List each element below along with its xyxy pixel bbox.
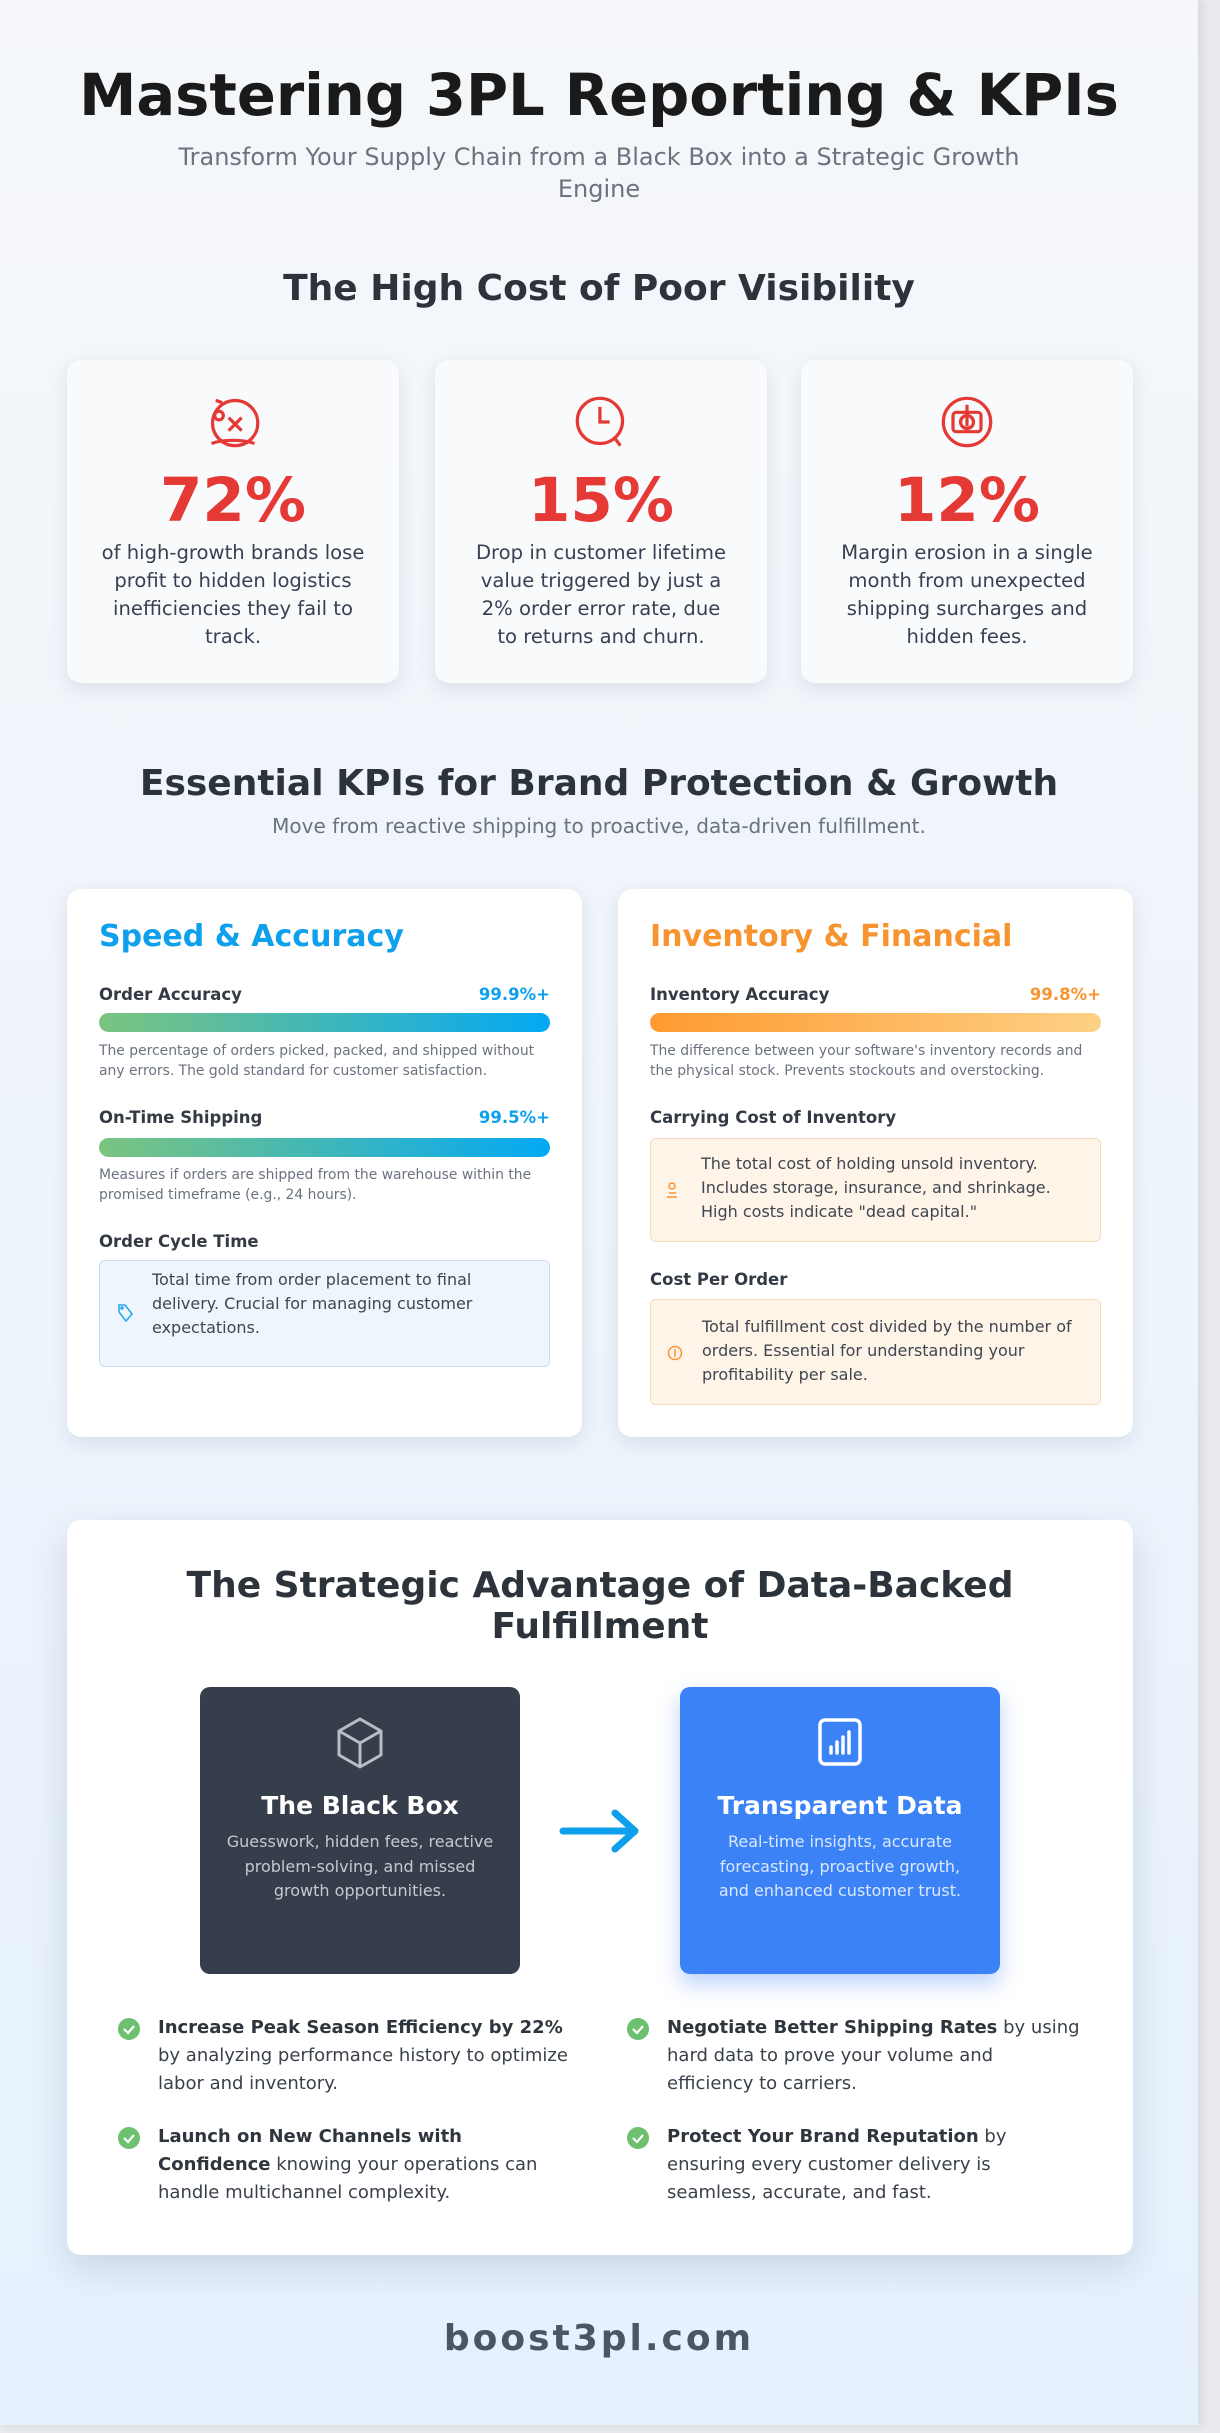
panel: strategic advantage — [67, 1520, 1133, 2255]
box text: Real-time insights, accurate forecasting, proactive growth, and enhanced customer trust. — [719, 1832, 961, 1900]
icon: broken piggy — [210, 398, 260, 448]
heading: essential KPIs: Essential KPIs for Brand Protection & Growth — [140, 763, 1058, 804]
icon: cube — [338, 1718, 382, 1768]
kpi: on-time shipping — [99, 1108, 550, 1127]
kpi: inventory accuracy — [650, 985, 1101, 1004]
box: black box — [200, 1687, 520, 1974]
kpi: on-time shipping: On-Time Shipping — [99, 1108, 262, 1127]
stat card 2 — [435, 360, 767, 683]
kpi: carrying cost: Carrying Cost of Inventory — [650, 1108, 896, 1127]
stat card 3 — [801, 360, 1133, 683]
subtitle: Transform Your Supply Chain from a Black Box into a Strategic Growth Engine — [178, 143, 1020, 203]
panel: inventory & financial: Total fulfillment cost divided by the number of orders. Essential for understanding your profitability per sale. — [702, 1317, 1072, 1384]
number: 15% — [528, 465, 674, 536]
footer: boost3pl.com — [444, 2318, 754, 2359]
stat card 1 — [67, 360, 399, 683]
kpi: cost per order: Cost Per Order — [650, 1270, 787, 1289]
heading: high cost: The High Cost of Poor Visibility — [283, 268, 915, 309]
panel: speed & accuracy — [67, 889, 582, 1437]
benefit 1: Increase Peak Season Efficiency by 22% by analyzing performance history to optimize labor and inventory. — [158, 2017, 568, 2094]
kpi: order accuracy: Order Accuracy — [99, 985, 242, 1004]
panel: inventory & financial: The total cost of holding unsold inventory. Includes storage, insurance, and shrinkage. High costs indicate "dead capital." — [701, 1154, 1051, 1221]
icon: tag — [118, 1304, 133, 1322]
panel: inventory & financial: The difference between your software's inventory records and the physical stock. Prevents stockouts and overstocking. — [650, 1043, 1082, 1079]
kpi: order accuracy — [99, 985, 550, 1004]
benefit 3: Launch on New Channels with Confidence knowing your operations can handle multichannel complexity. — [158, 2126, 537, 2203]
icon: money — [942, 396, 992, 448]
benefit 2: Negotiate Better Shipping Rates by using hard data to prove your volume and efficiency to carriers. — [667, 2017, 1080, 2094]
icon: clock — [576, 396, 624, 447]
kpi: order accuracy: 99.9%+ — [479, 985, 550, 1004]
panel: speed & accuracy: Measures if orders are shipped from the warehouse within the promised timeframe (e.g., 24 hours). — [99, 1167, 531, 1203]
icon: dollar coin — [668, 1346, 682, 1360]
panel title: Inventory & Financial — [650, 919, 1012, 954]
title: Mastering 3PL Reporting & KPIs — [79, 62, 1119, 129]
box: transparent data — [680, 1687, 1000, 1974]
number: 72% — [160, 465, 306, 536]
kpi: inventory accuracy: 99.8%+ — [1030, 985, 1101, 1004]
icon: hand coin — [667, 1182, 677, 1198]
panel title: Speed & Accuracy — [99, 919, 404, 954]
arrow — [560, 1810, 638, 1852]
description: Margin erosion in a single month from unexpected shipping surcharges and hidden fees. — [841, 541, 1093, 648]
panel heading: The Strategic Advantage of Data-Backed Fulfillment — [187, 1565, 1013, 1647]
icon: chart — [818, 1718, 862, 1766]
kpi: on-time shipping: 99.5%+ — [479, 1108, 550, 1127]
box title: Transparent Data — [717, 1791, 963, 1820]
panel: speed & accuracy: The percentage of orders picked, packed, and shipped without any errors. The gold standard for customer satisfaction. — [99, 1043, 534, 1079]
subheading: Move from reactive shipping to proactive, data-driven fulfillment. — [272, 814, 926, 838]
kpi: inventory accuracy: Inventory Accuracy — [650, 985, 829, 1004]
box text: Guesswork, hidden fees, reactive problem-solving, and missed growth opportunities. — [227, 1832, 493, 1900]
panel: inventory & financial — [618, 889, 1133, 1437]
kpi: order cycle time: Order Cycle Time — [99, 1232, 259, 1251]
number: 12% — [894, 465, 1040, 536]
description: of high-growth brands lose profit to hidden logistics inefficiencies they fail to track. — [102, 541, 364, 648]
benefit 4: Protect Your Brand Reputation by ensuring every customer delivery is seamless, accurate, and fast. — [667, 2126, 1006, 2203]
description: Drop in customer lifetime value triggered by just a 2% order error rate, due to returns and churn. — [476, 541, 726, 648]
panel: speed & accuracy: Total time from order placement to final delivery. Crucial for managing customer expectations. — [152, 1270, 472, 1337]
box title: The Black Box — [261, 1791, 459, 1820]
